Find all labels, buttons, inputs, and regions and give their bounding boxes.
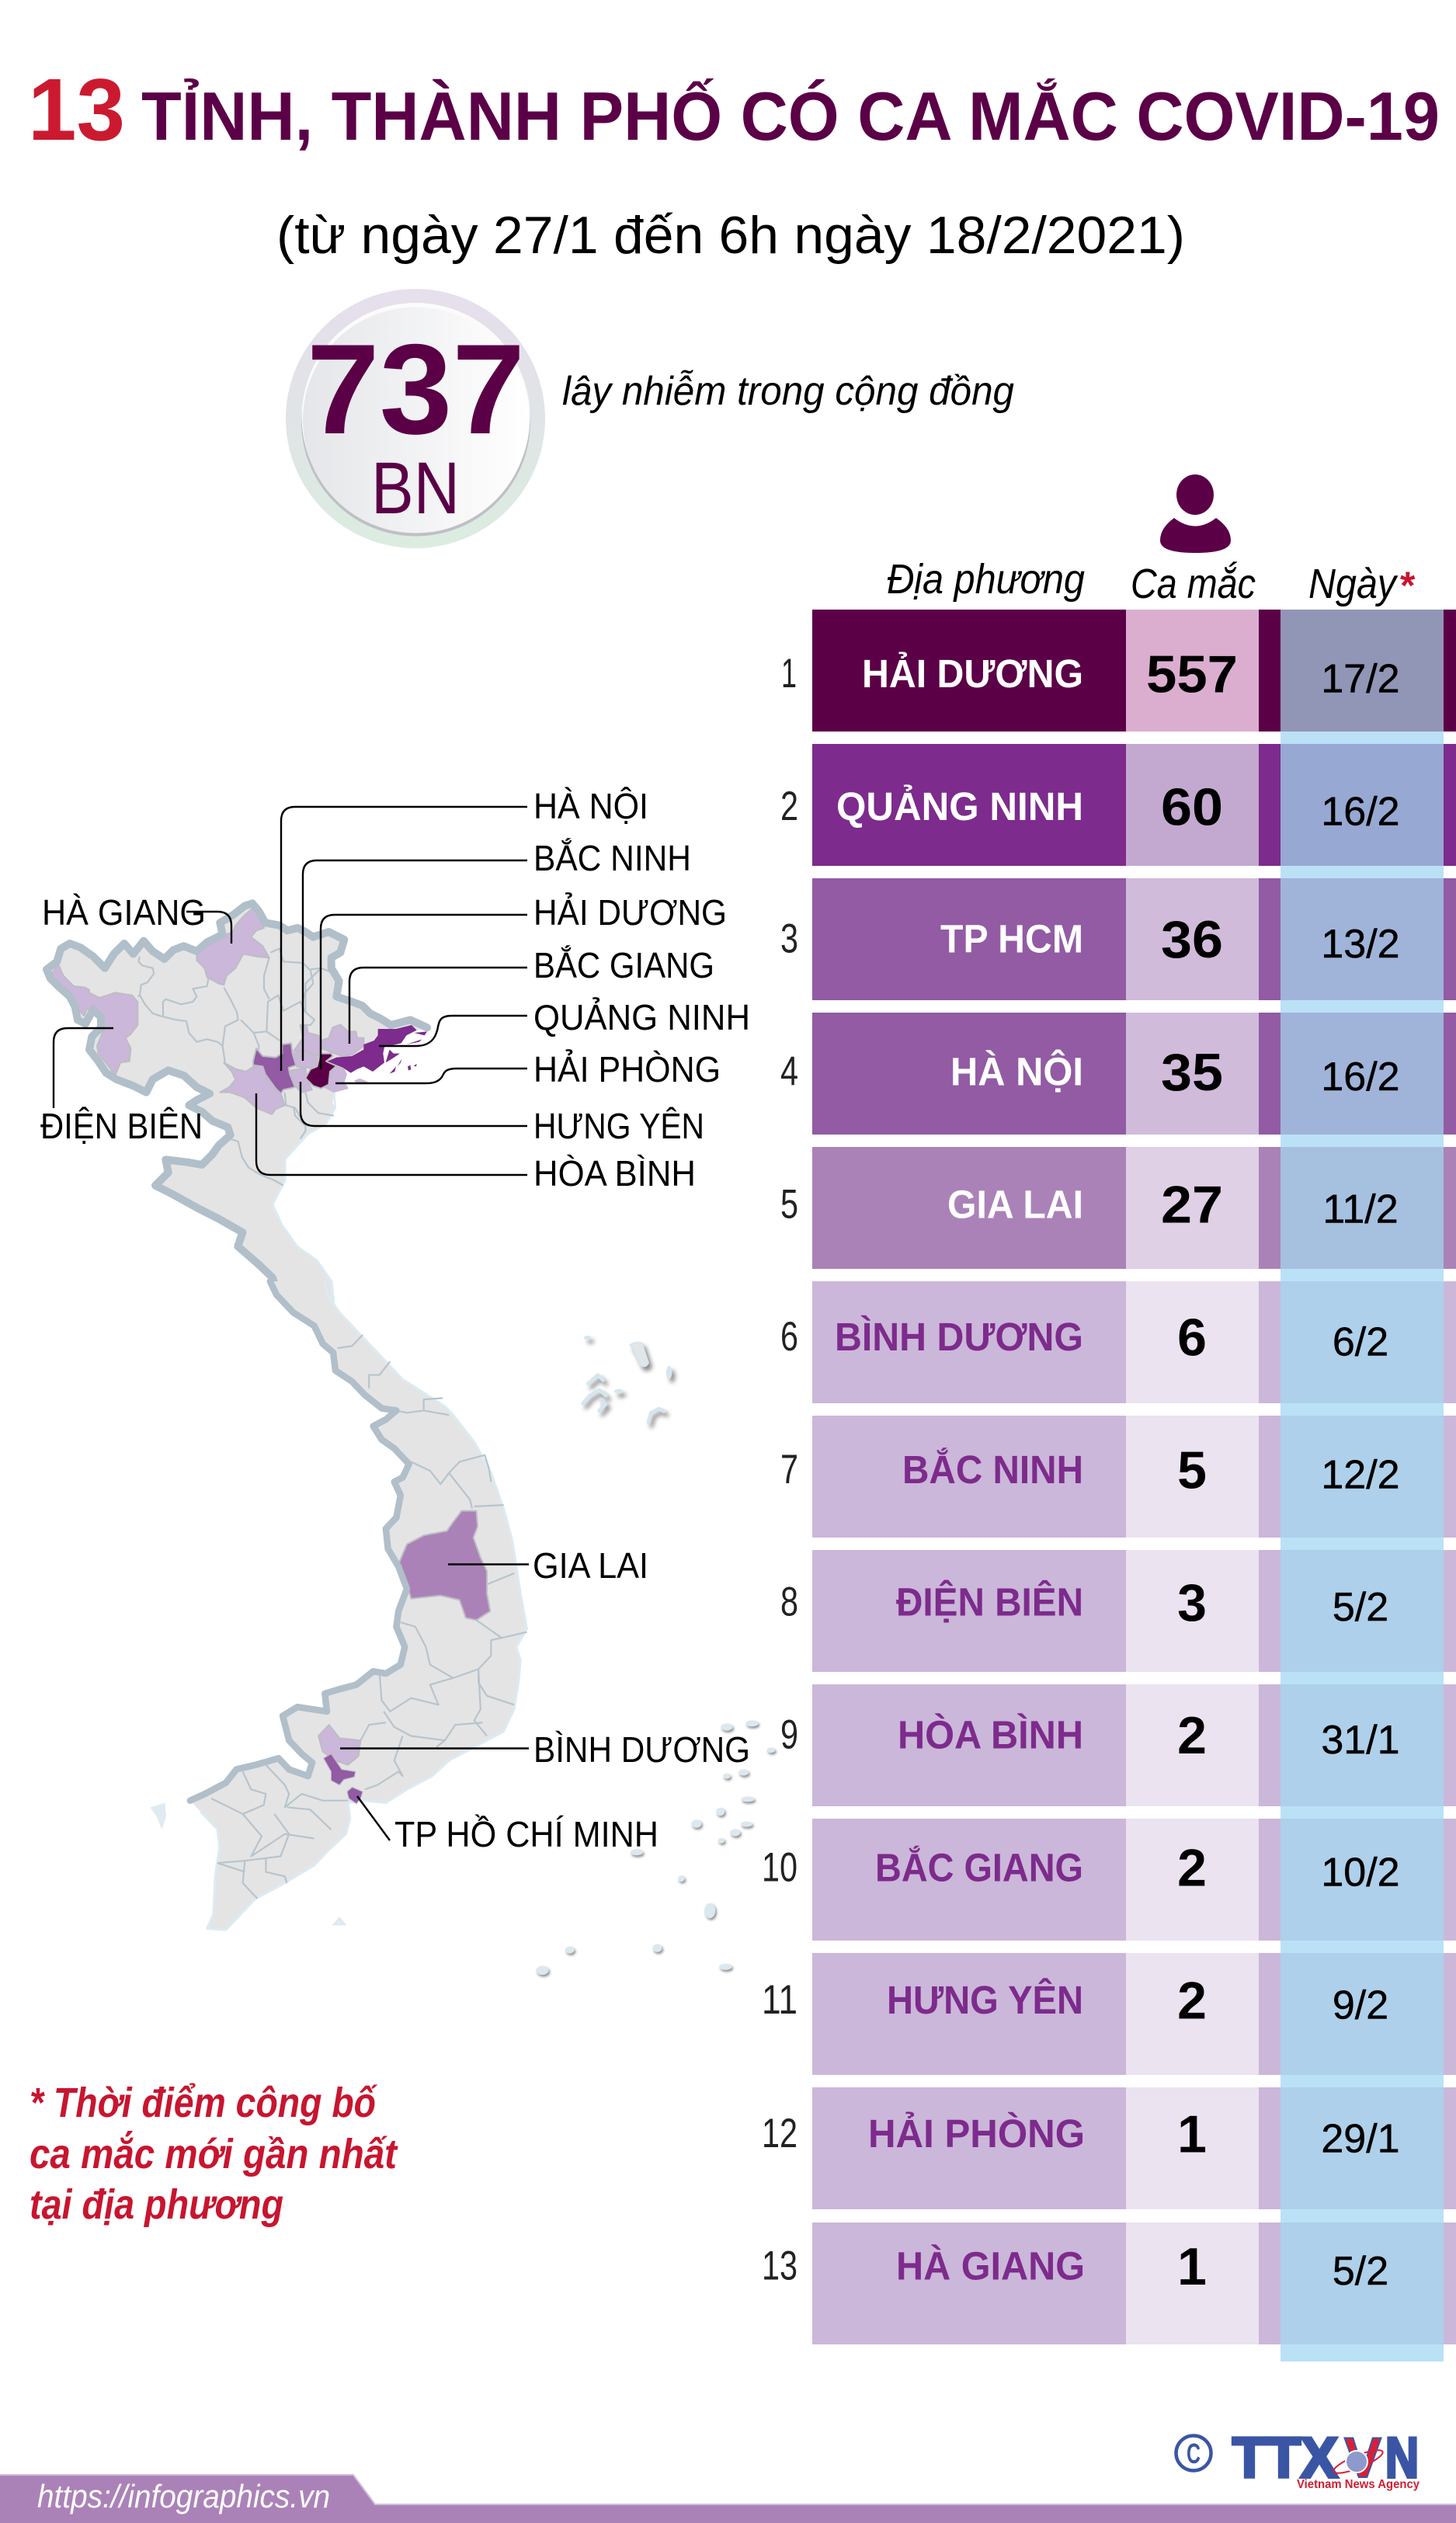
label: TP Hồ Chí Minh	[357, 1796, 659, 1854]
province: Bình Dương	[318, 1725, 360, 1765]
table header: Ngày	[1308, 561, 1399, 607]
row 8: 5/2	[1333, 1585, 1388, 1630]
row 9: 2	[1177, 1706, 1207, 1765]
row 4: HÀ NỘI	[950, 1048, 1083, 1093]
map of Vietnam	[47, 903, 775, 1975]
label: Bắc Giang	[349, 945, 714, 1044]
province: Hưng Yên	[290, 1068, 312, 1093]
footer bar: https://infographics.vn	[37, 2478, 330, 2514]
label: TP Hồ Chí Minh: TP HỒ CHÍ MINH	[394, 1814, 659, 1854]
row 11	[762, 1953, 1456, 2075]
islands: Phú Quốc and Côn Đảo	[150, 1803, 346, 1925]
row 2	[780, 744, 1456, 866]
row 6	[780, 1281, 1456, 1403]
row 13: 1	[1177, 2237, 1207, 2296]
label: Hà Giang: HÀ GIANG	[42, 892, 206, 933]
date column background	[1281, 610, 1444, 2361]
row 7: 7	[780, 1447, 798, 1493]
stat caption: lây nhiễm trong cộng đồng	[562, 369, 1014, 414]
label: Bắc Ninh: BẮC NINH	[533, 838, 691, 878]
label: Hòa Bình	[256, 1093, 696, 1194]
label: Quảng Ninh: QUẢNG NINH	[533, 997, 750, 1037]
row 3: 13/2	[1321, 922, 1400, 967]
label: Điện Biên	[40, 1028, 203, 1146]
row 1: 17/2	[1321, 657, 1400, 702]
footer bar	[0, 2475, 1456, 2523]
province: Hòa Bình	[220, 1062, 285, 1114]
row 5: 11/2	[1322, 1187, 1399, 1232]
row 7: BẮC NINH	[902, 1447, 1083, 1492]
map labels and leader lines	[40, 786, 750, 1854]
label: Hòa Bình: HÒA BÌNH	[533, 1153, 696, 1194]
row 7: 12/2	[1321, 1452, 1400, 1497]
province: Quảng Ninh	[328, 1025, 427, 1074]
row 3: 36	[1161, 910, 1223, 969]
row 12: 12	[762, 2111, 797, 2156]
row 8: 8	[780, 1579, 798, 1625]
label: Điện Biên: ĐIỆN BIÊN	[40, 1106, 203, 1146]
row 13	[762, 2222, 1456, 2344]
footnote: ca mắc mới gần nhất	[30, 2131, 398, 2177]
row 13: 13	[762, 2243, 797, 2289]
title: 13	[28, 61, 125, 158]
row 13: 5/2	[1333, 2249, 1388, 2294]
icon: person	[1160, 474, 1231, 553]
map: northern region	[47, 903, 427, 1308]
row 9: HÒA BÌNH	[898, 1713, 1083, 1757]
row 11: HƯNG YÊN	[887, 1977, 1083, 2022]
label: Bắc Ninh	[303, 838, 691, 1061]
logo: TTXVN: V	[1344, 2427, 1381, 2490]
stat badge: 737 BN	[286, 289, 545, 548]
label: Hải Phòng	[335, 1049, 721, 1089]
label: Hải Phòng: HẢI PHÒNG	[533, 1049, 721, 1089]
row 9: 31/1	[1321, 1718, 1400, 1763]
province: Hải Dương	[305, 1054, 336, 1089]
label: Bình Dương: BÌNH DƯƠNG	[533, 1729, 750, 1770]
row 3	[780, 878, 1456, 1000]
stat badge: 737 BN: BN	[371, 447, 460, 530]
label: Quảng Ninh	[379, 997, 750, 1046]
label: Gia Lai: GIA LAI	[533, 1545, 648, 1586]
row 3: TP HCM	[940, 917, 1083, 961]
row 6: BÌNH DƯƠNG	[835, 1315, 1083, 1359]
row 1: 557	[1146, 645, 1238, 704]
province: Hải Phòng	[324, 1066, 367, 1093]
row 10: 10/2	[1321, 1851, 1400, 1896]
row 11: 2	[1177, 1971, 1207, 2030]
row 4: 35	[1161, 1043, 1223, 1102]
row 2: 16/2	[1321, 789, 1400, 834]
label: Hưng Yên	[301, 1082, 704, 1146]
table	[762, 610, 1456, 2361]
row 6: 6/2	[1333, 1320, 1388, 1365]
row 10: 10	[762, 1844, 797, 1890]
row 3: 3	[780, 916, 798, 962]
row 2: 60	[1161, 777, 1223, 836]
province: Điện Biên	[52, 964, 137, 1076]
label: Hải Dương	[321, 892, 727, 1069]
row 5: 27	[1161, 1176, 1223, 1235]
row 12	[762, 2087, 1456, 2209]
row 4	[780, 1013, 1456, 1135]
row 1	[781, 610, 1456, 732]
footnote: * Thời điểm công bố	[30, 2080, 378, 2126]
row 2: 2	[780, 784, 798, 829]
title: TỈNH, THÀNH PHỐ CÓ CA MẮC COVID-19	[141, 78, 1440, 155]
stat badge: 737 BN: 737	[307, 318, 525, 460]
province: TP Hồ Chí Minh	[324, 1753, 363, 1804]
map: southern region	[150, 1281, 775, 1975]
row 9	[780, 1684, 1456, 1806]
row 1: HẢI DƯƠNG	[862, 651, 1083, 696]
row 5: GIA LAI	[947, 1182, 1083, 1226]
row 7: 5	[1177, 1440, 1207, 1500]
row 7	[780, 1416, 1456, 1538]
table header: Ca mắc	[1131, 561, 1256, 607]
row 6: 6	[1177, 1308, 1207, 1367]
label: Bắc Giang: BẮC GIANG	[533, 945, 714, 985]
footnote: tại địa phương	[30, 2181, 283, 2228]
province: Hà Nội	[253, 1043, 297, 1093]
province: Vĩnh Phúc area shade	[294, 1025, 321, 1056]
row 5: 5	[780, 1181, 798, 1227]
row 8: ĐIỆN BIÊN	[896, 1579, 1083, 1625]
province: Bắc Giang	[321, 1024, 363, 1056]
row 8: 3	[1177, 1573, 1207, 1632]
row 10: BẮC GIANG	[875, 1844, 1083, 1889]
logo: TTXVN	[1176, 2427, 1420, 2491]
label: Hà Nội: HÀ NỘI	[533, 786, 648, 826]
footnote	[30, 2080, 398, 2228]
label: Hải Dương: HẢI DƯƠNG	[533, 892, 727, 933]
row 4: 4	[780, 1048, 798, 1095]
table header	[887, 556, 1416, 607]
row 13: HÀ GIANG	[896, 2244, 1085, 2288]
row 10: 2	[1177, 1839, 1207, 1898]
label: Hà Nội	[281, 786, 648, 1071]
islands: Hoàng Sa	[583, 1336, 672, 1423]
logo: TTXVN: TTX	[1232, 2427, 1338, 2490]
table header: Địa phương	[887, 556, 1085, 603]
row 12: HẢI PHÒNG	[868, 2111, 1085, 2156]
province: Gia Lai	[399, 1511, 490, 1620]
label: Hưng Yên: HƯNG YÊN	[533, 1106, 704, 1146]
row 9: 9	[780, 1712, 798, 1758]
islands: Trường Sa	[536, 1720, 775, 1975]
row 4: 16/2	[1321, 1055, 1400, 1100]
row 12: 1	[1177, 2104, 1207, 2163]
row 2: QUẢNG NINH	[836, 784, 1083, 829]
row 10	[762, 1819, 1456, 1941]
logo: TTXVN: Vietnam News Agency	[1297, 2478, 1420, 2491]
table header: *	[1399, 564, 1416, 607]
province: Hà Giang	[196, 909, 269, 985]
row 6: 6	[780, 1314, 798, 1360]
logo: TTXVN: C	[1187, 2438, 1201, 2469]
row 5	[780, 1147, 1456, 1269]
row 11: 11	[762, 1977, 797, 2023]
row 11: 9/2	[1333, 1983, 1388, 2028]
row 1: 1	[781, 651, 797, 697]
row 8	[780, 1550, 1456, 1672]
logo: TTXVN: N	[1385, 2427, 1419, 2490]
row 12: 29/1	[1321, 2116, 1400, 2161]
subtitle: (từ ngày 27/1 đến 6h ngày 18/2/2021)	[276, 206, 1185, 265]
province: Bắc Ninh	[293, 1051, 317, 1068]
